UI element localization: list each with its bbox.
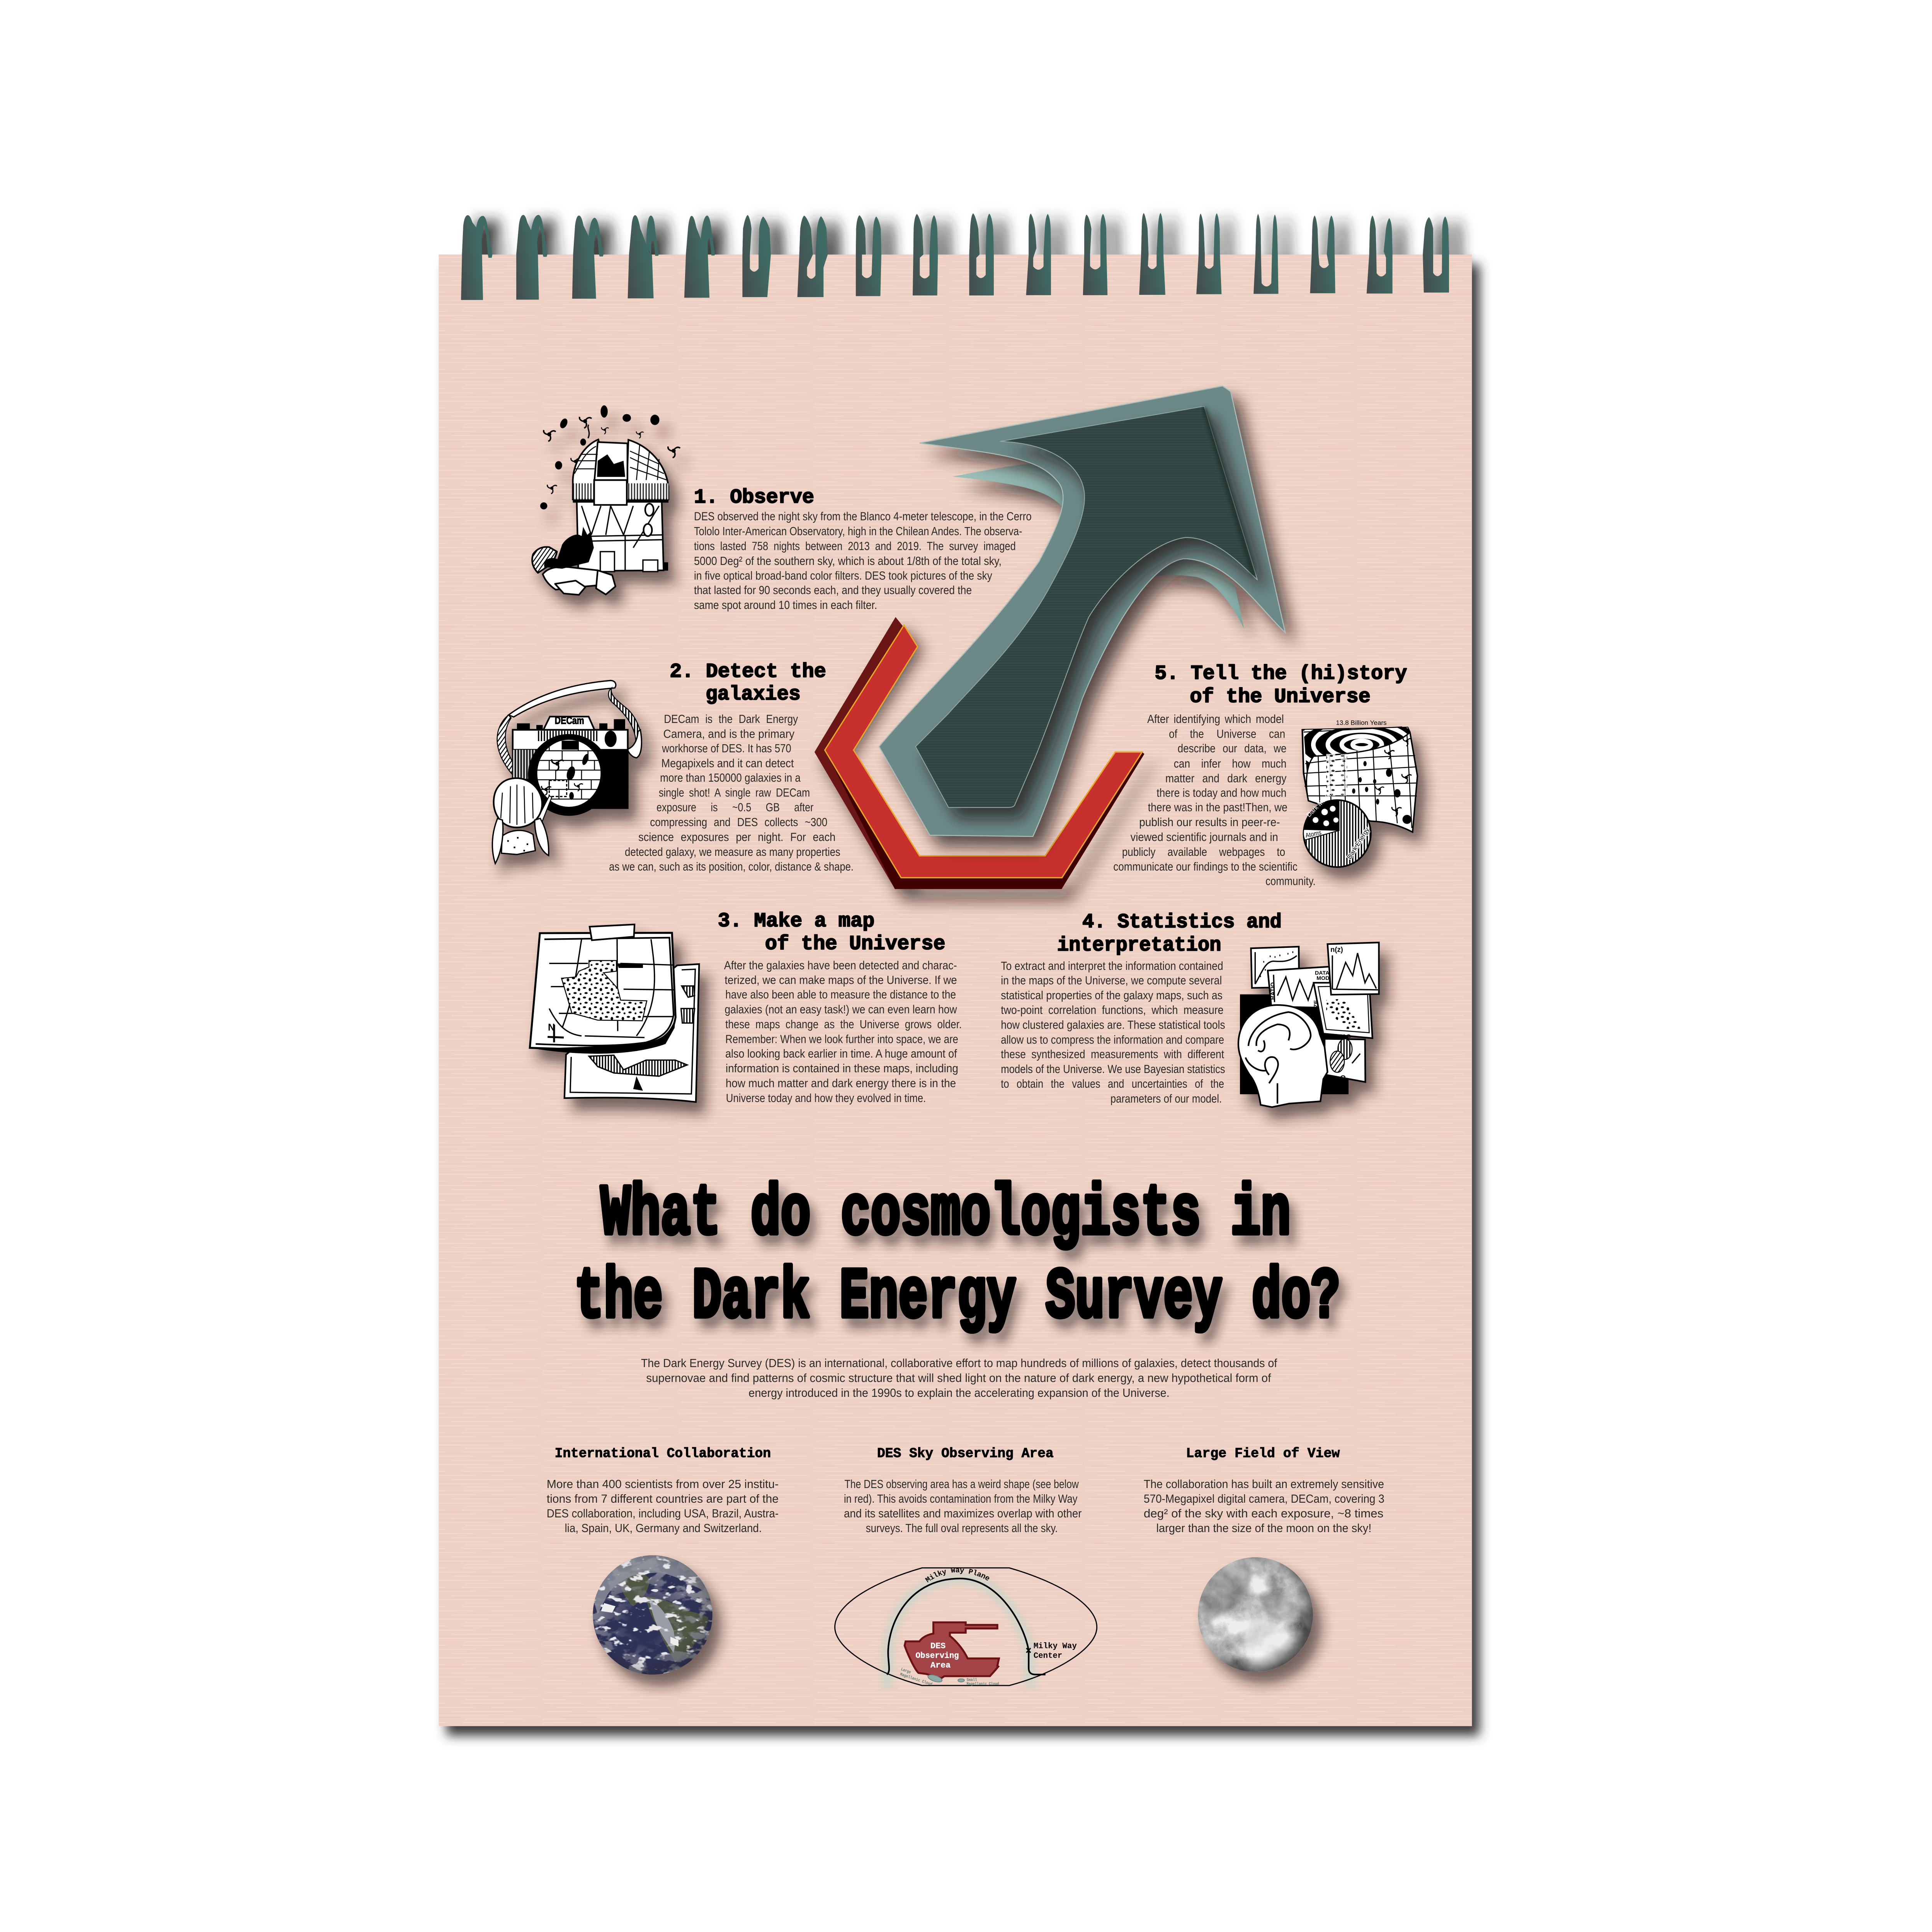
body text: To extract and interpret the information contained [1001,959,1223,973]
intro text: supernovae and find patterns of cosmic structure that will shed light on the nature of dark energy, a new hypothetical form of [646,1371,1271,1385]
heading [1057,911,1282,957]
DES observing area shape [905,1622,999,1678]
area label: Area [930,1660,951,1670]
body text: galaxies (not an easy task!) we can even learn how [724,1003,957,1016]
body text: matter and dark energy [1165,772,1287,785]
icon: head and statistical plots: SIZE [1313,1000,1320,1013]
body text: Camera, and is the primary [663,727,795,741]
icon: head and statistical plots: n(z) [1330,945,1343,953]
body text: in five optical broad-band color filters. DES took pictures of the sky [694,569,992,582]
icon: observatory with galaxies [532,405,680,595]
body text: More than 400 scientists from over 25 institu- [547,1477,779,1491]
body text: 5000 Deg² of the southern sky, which is about 1/8th of the total sky, [694,554,1002,568]
heading: interpretation [1057,934,1221,957]
body text: these maps change as the Universe grows older. [725,1017,962,1031]
body text [1113,712,1316,888]
icon: maps of the universe [530,924,699,1102]
body text: Remember: When we look further into space, we are [725,1032,958,1046]
body text: that lasted for 90 seconds each, and they usually covered the [694,583,972,597]
center marker [1026,1648,1031,1653]
body text: exposure is ~0.5 GB after [656,801,813,814]
cloud labels [899,1667,999,1687]
heading: 1. Observe [694,486,814,509]
body text: Tololo Inter-American Observatory, high in the Chilean Andes. The observa- [694,524,1022,538]
body text: two-point correlation functions, which measure [1001,1003,1223,1017]
body text: also looking back earlier in time. A huge amount of [725,1047,957,1060]
body text: community. [1265,874,1316,888]
spiral binding rings [461,213,1449,300]
heading [718,910,945,956]
panel: step 5 tell the history [1113,662,1425,888]
body text [844,1477,1082,1535]
label text: Milky Way Plane [924,1566,991,1585]
title: What do cosmologists in [600,1174,1291,1255]
body text: Megapixels and it can detect [662,757,794,770]
curved label path: Milky Way Plane [928,1572,991,1583]
panel: large field of view [1144,1446,1384,1675]
body text: larger than the size of the moon on the sky! [1156,1521,1371,1535]
heading: Large Field of View [1186,1446,1340,1461]
panel: step 1 observe [532,405,1032,612]
body text: DES observed the night sky from the Blanco 4-meter telescope, in the Cerro [694,510,1032,523]
body text: viewed scientific journals and in [1131,830,1278,844]
body text: parameters of our model. [1111,1092,1222,1105]
intro text [641,1356,1277,1400]
cloud labels: Magellanic Cloud [967,1682,999,1687]
heading [1155,662,1407,708]
body text: compressing and DES collects ~300 [650,815,827,829]
body text: terized, we can make maps of the Universe. If we [724,973,957,987]
body text: publish our results in peer-re- [1139,815,1280,829]
body text: After identifying which model [1147,712,1284,726]
icon: head and statistical plots: RATIO [1269,982,1276,1000]
title: the Dark Energy Survey do? [575,1257,1340,1338]
panel: DES sky observing area [835,1446,1097,1689]
arrow outer body [879,386,1285,837]
area label: Observing [916,1651,959,1660]
body text: surveys. The full oval represents all the sky. [866,1521,1058,1535]
body text: describe our data, we [1178,742,1286,755]
icon: universe sheet and energy pie: Atoms [1304,829,1322,839]
heading: 2. Detect the [670,660,826,683]
panel: step 4 statistics and interpretation [1001,911,1379,1107]
cloud labels: Magellanic Cloud [899,1672,933,1687]
heading: galaxies [706,683,801,706]
red chevron front [825,625,1142,878]
body text: communicate our findings to the scientific [1113,860,1298,873]
icon: universe sheet and energy pie: Dark Energy [1345,826,1371,861]
milky way center label [1034,1642,1077,1660]
body text: how much matter and dark energy there is in the [726,1077,956,1090]
body text: these synthesized measurements with different [1001,1048,1224,1061]
body text: science exposures per night. For each [638,830,835,844]
panel: step 3 make a map [530,910,962,1105]
body text: same spot around 10 times in each filter. [694,598,877,612]
body text: how clustered galaxies are. These statistical tools [1001,1018,1225,1032]
body text: more than 150000 galaxies in a [660,771,801,784]
body text: lia, Spain, UK, Germany and Switzerland. [565,1521,762,1535]
icon: earth [588,1550,717,1679]
icon: head and statistical plots: MAG [1337,1033,1351,1040]
heading: International Collaboration [555,1446,771,1461]
icon: DECam camera and girl: DECam [555,715,584,726]
icon: moon [1196,1555,1316,1675]
body text [694,510,1032,612]
body text: After the galaxies have been detected and charac- [724,958,957,972]
body text: to obtain the values and uncertainties of the [1001,1077,1224,1090]
body text: detected galaxy, we measure as many properties [625,845,840,859]
body text: allow us to compress the information and compare [1001,1033,1224,1046]
chart: sky map oval [835,1566,1097,1689]
icon: universe sheet and energy pie: Dark Matter [1305,789,1334,818]
small magellanic cloud [958,1679,964,1682]
body text: single shot! A single raw DECam [659,786,810,799]
icon: universe sheet and energy pie: 13.8 Billion Years [1336,719,1387,726]
icon: head and statistical plots [1238,942,1379,1107]
heading: DES Sky Observing Area [877,1446,1054,1461]
body text [724,958,962,1105]
body text: in red). This avoids contamination from the Milky Way [844,1492,1078,1505]
icon: head and statistical plots: MODEL [1316,975,1337,981]
body text: 570-Megapixel digital camera, DECam, covering 3 [1144,1492,1384,1505]
area label [916,1641,959,1670]
icon: large arrow with red chevron [815,386,1285,889]
icon: universe sheet and energy pie [1299,717,1425,867]
body text: tions from 7 different countries are part of the [547,1492,779,1505]
arrow light teal back tips [952,464,1244,629]
spiral binding shadow [461,213,1449,300]
large magellanic cloud [927,1673,943,1684]
body text: DES collaboration, including USA, Brazil, Austra- [547,1507,779,1520]
body text: of the Universe can [1169,727,1285,741]
heading: 3. Make a map [718,910,874,932]
body text: workhorse of DES. It has 570 [662,742,791,755]
title [575,1174,1340,1338]
heading [670,660,826,706]
panel: step 2 detect the galaxies [492,660,854,873]
body text: there is today and how much [1156,786,1286,799]
milky way center label: Center [1034,1651,1062,1660]
body text [1144,1477,1384,1535]
body text: The DES observing area has a weird shape (see below [845,1477,1079,1491]
body text: have also been able to measure the distance to the [725,988,956,1001]
cloud labels: Small [967,1678,977,1682]
arrow inner right-edge shading [1204,408,1253,575]
body text: information is contained in these maps, including [726,1061,958,1075]
body text: as we can, such as its position, color, distance & shape. [609,860,854,873]
body text: deg² of the sky with each exposure, ~8 times [1144,1507,1383,1520]
body text: DECam is the Dark Energy [664,712,798,726]
body text [547,1477,779,1535]
intro text: energy introduced in the 1990s to explain the accelerating expansion of the Universe. [748,1386,1170,1400]
body text: Universe today and how they evolved in time. [726,1091,926,1105]
body text [609,712,854,873]
arrow inner body [916,406,1257,808]
milky way plane line [887,1578,1046,1675]
body text: publicly available webpages to [1122,845,1285,859]
icon: head and statistical plots: DATA [1315,970,1329,976]
milky way center label: Milky Way [1034,1642,1077,1651]
body text: in the maps of the Universe, we compute several [1001,974,1222,987]
body text: statistical properties of the galaxy maps, such as [1001,988,1223,1002]
icon: maps of the universe: N [548,1022,555,1033]
heading: of the Universe [765,933,945,956]
full sky oval [835,1568,1097,1685]
area label: DES [930,1641,946,1651]
intro text: The Dark Energy Survey (DES) is an international, collaborative effort to map hundreds of millions of galaxies, detect thousands of [641,1356,1277,1370]
heading: of the Universe [1190,685,1371,708]
body text: models of the Universe. We use Bayesian statistics [1001,1062,1225,1076]
body text [1001,959,1225,1105]
body text: and its satellites and maximizes overlap with other [844,1507,1082,1520]
heading: 4. Statistics and [1082,911,1282,934]
red chevron back [815,617,1145,889]
heading: 5. Tell the (hi)story [1155,662,1407,685]
body text: can infer how much [1174,757,1286,770]
icon: DECam camera and girl [492,680,641,864]
body text: there was in the past!Then, we [1148,801,1287,814]
icon: head and statistical plots: Ω [1340,1074,1346,1082]
cloud labels: Large [900,1667,912,1675]
notebook paper [439,255,1472,1726]
panel: international collaboration [547,1446,779,1679]
body text: tions lasted 758 nights between 2013 and 2019. The survey imaged [694,539,1016,553]
milky way glow [887,1578,1031,1689]
body text: The collaboration has built an extremely sensitive [1144,1477,1384,1491]
